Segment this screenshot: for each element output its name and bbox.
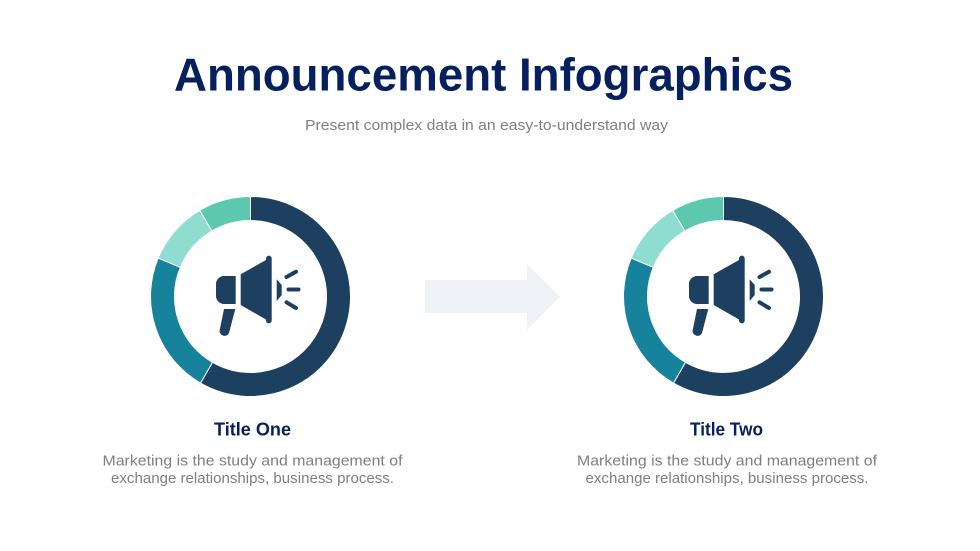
- arrow: [425, 264, 560, 330]
- text block: description two: exchange relationships, business process.: [586, 470, 868, 487]
- text block: description two: Marketing is the study and management of: [577, 452, 878, 470]
- heading: title two: Title Two: [690, 420, 763, 440]
- heading: title one: Title One: [214, 420, 291, 440]
- donut chart: two: [624, 196, 824, 396]
- panel: title one: [102, 196, 403, 487]
- donut chart: one: [151, 196, 351, 396]
- title: Announcement Infographics: [174, 48, 793, 100]
- icon: megaphone two: [689, 256, 772, 336]
- text block: description one: exchange relationships, business process.: [111, 470, 394, 487]
- text block: description one: [102, 452, 403, 487]
- icon: megaphone one: [216, 256, 298, 336]
- subtitle: Present complex data in an easy-to-understand way: [305, 117, 669, 134]
- text block: description two: [577, 452, 878, 487]
- panel: title two: [577, 196, 878, 487]
- text block: description one: Marketing is the study and management of: [102, 452, 403, 470]
